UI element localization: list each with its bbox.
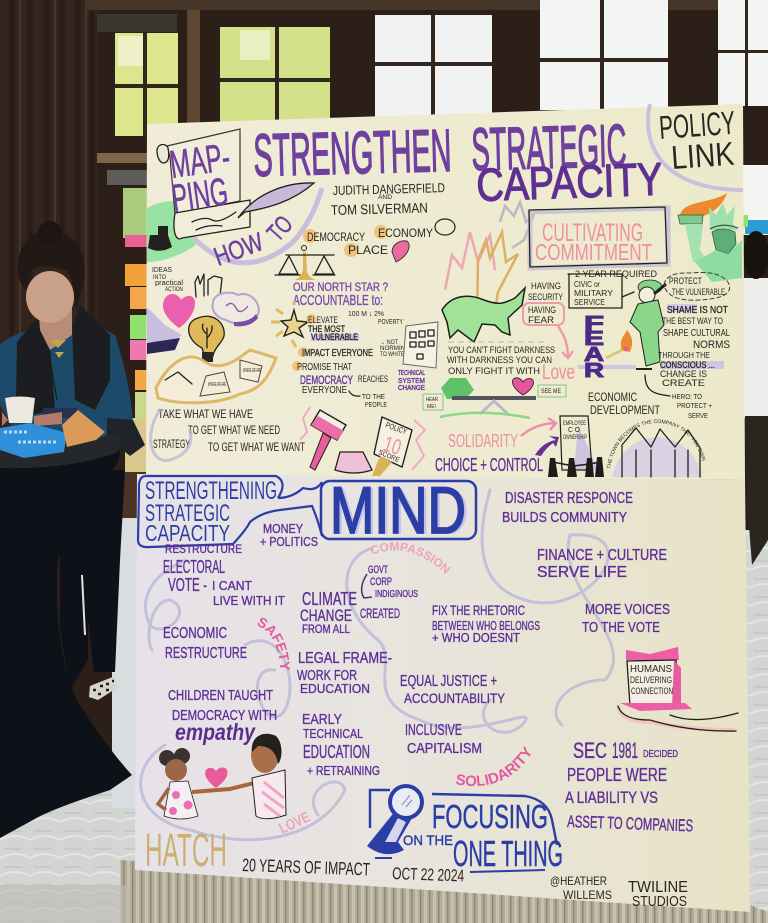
word: FEAR, with burning match: F <box>584 313 604 335</box>
text: shame is not the best way: SHAPE CULTURAL <box>663 327 730 339</box>
text: inclusive capitalism: CAPITALISM <box>407 740 482 757</box>
text: sec 1981 decided <box>565 738 693 835</box>
accountability list: PROMISE THAT <box>297 362 352 373</box>
header: strengthening strategic capacity banner <box>138 476 322 547</box>
text: disaster response builds community <box>502 490 633 526</box>
box: two year required service: SERVICE <box>574 297 605 307</box>
scroll: MAP-PING: MAP- <box>167 136 233 187</box>
box: two year required service: CIVIC or <box>574 279 600 289</box>
icon: statue of liberty <box>678 193 742 282</box>
democracy economy place: DEMOCRACY <box>307 230 365 244</box>
policy score sign: POLICY <box>384 420 409 437</box>
text: equal justice + accountability <box>400 673 506 706</box>
text: sec 1981 decided: ASSET TO COMPANIES <box>567 812 693 835</box>
event line: 20 years of impact, date: 20 YEARS OF IMPACT <box>242 855 370 879</box>
text: sec 1981 decided: A LIABILITY VS <box>565 788 658 807</box>
accountability list: ELEVATE <box>308 315 338 325</box>
text: legal framework for education: LEGAL FRAME- <box>298 650 392 667</box>
text: legal framework for education: EDUCATION <box>300 681 370 696</box>
credit: Heather Willems, Twiline Studios <box>550 874 688 910</box>
text: economic development: DEVELOPMENT <box>590 403 661 417</box>
word: FEAR, with burning match: E <box>584 328 604 350</box>
icon: gavel and sound block <box>310 410 372 473</box>
icon: seesaw with heart: HEAR <box>426 397 438 403</box>
solidarity and choice + control: CHOICE + CONTROL <box>435 455 543 475</box>
text: inclusive capitalism <box>405 722 482 757</box>
icon: employee co-ownership building and people: EMPLOYEE <box>563 421 586 427</box>
heading: MIND: MIND <box>330 473 466 547</box>
accountability list: POVERTY <box>378 317 403 326</box>
accountability list: 100 M ↓ 2% <box>348 309 384 318</box>
credit: Heather Willems, Twiline Studios: TWILINE <box>628 879 688 896</box>
heading: focusing on the one thing, with magnifier: ONE THING <box>453 833 563 874</box>
title: STRENGTHEN STRATEGIC CAPACITY: CAPACITY <box>476 153 663 211</box>
text: finance + culture serve life: SERVE LIFE <box>537 564 627 581</box>
solidarity and choice + control: SOLIDARITY <box>448 431 518 451</box>
text: fix the rhetoric: + WHO DOESNT <box>432 630 520 645</box>
credit: Heather Willems, Twiline Studios: STUDIOS <box>632 893 687 910</box>
policy score sign: SCORE <box>377 449 401 464</box>
text: early technical education: EDUCATION <box>303 742 370 762</box>
icon: gift held on a hand: CONNECTION <box>631 686 673 697</box>
accountability list: → NOT <box>380 340 398 346</box>
icon: seesaw with heart: ME! <box>427 404 436 410</box>
text: early technical education: + RETRAINING <box>307 763 380 778</box>
strategy text: TO GET WHAT WE WANT <box>208 440 305 454</box>
text: early technical education: EARLY <box>302 711 342 728</box>
text: money + politics: MONEY <box>263 521 303 536</box>
logo: Policy Link <box>648 104 743 190</box>
illustration: flames and reaching hands <box>445 202 534 322</box>
quote: fight darkness with love <box>447 345 575 384</box>
technical system change grid <box>398 322 438 392</box>
callout: hero to protect and serve <box>645 375 713 420</box>
text: restructure electoral vote: LIVE WITH IT <box>213 593 285 608</box>
text: shame is not the best way: CHANGE IS <box>660 369 707 379</box>
text: disaster response builds community: DISASTER RESPONCE <box>505 490 633 507</box>
mountain landscape: WHERE WE ARE <box>208 382 226 388</box>
quote: fight darkness with love: YOU CAN'T FIGHT DARKNESS <box>448 345 555 356</box>
text: restructure electoral vote: ELECTORAL <box>163 557 225 577</box>
quote: fight darkness with love: ONLY FIGHT IT WITH <box>448 366 540 377</box>
callout: hero to protect and serve: PROTECT + <box>677 401 713 410</box>
word: FEAR, with burning match: R <box>584 360 605 382</box>
heading: focusing on the one thing, with magnifier <box>367 786 563 874</box>
word: FEAR, with burning match <box>578 313 636 382</box>
text: fix the rhetoric: BETWEEN WHO BELONGS <box>432 618 540 633</box>
democracy economy place: PLACE <box>348 243 388 257</box>
scroll: MAP-PING: PING <box>169 171 231 221</box>
heading: focusing on the one thing, with magnifier: ON THE <box>403 832 453 848</box>
sticky notes on the wall <box>122 235 147 520</box>
accountability list: IMPACT EVERYONE <box>302 348 373 359</box>
logo: Policy Link: LINK <box>670 135 735 176</box>
mountain landscape: WHERE WE ARE <box>243 368 261 374</box>
word: FEAR, with burning match: A <box>584 344 604 366</box>
icon: scales <box>275 246 335 280</box>
democracy economy place <box>303 219 455 262</box>
header: strengthening strategic capacity banner: CAPACITY <box>145 520 230 546</box>
text: early technical education: TECHNICAL <box>303 726 363 741</box>
arc word: love: LOVE <box>277 809 313 838</box>
credit: Heather Willems, Twiline Studios: @HEATHER <box>550 874 607 888</box>
text: more voices to the vote: MORE VOICES <box>585 601 670 618</box>
heading: our north star accountable to: OUR NORTH STAR ? <box>293 280 388 294</box>
text: fix the rhetoric <box>432 602 540 645</box>
quote: fight darkness with love: WITH DARKNESS YOU CAN <box>447 355 552 366</box>
text: fix the rhetoric: FIX THE RHETORIC <box>432 602 525 618</box>
text: sec 1981 decided: 1981 <box>612 738 638 763</box>
accountability list: REACHES <box>358 374 388 384</box>
text: legal framework for education: WORK FOR <box>297 667 357 684</box>
text: climate change created from all: FROM ALL <box>302 622 350 636</box>
speakers: AND <box>378 195 393 201</box>
text: restructure electoral vote: RESTRUCTURE <box>165 542 242 556</box>
heading: focusing on the one thing, with magnifier: FOCUSING <box>432 798 548 835</box>
icon: green bull <box>442 288 545 342</box>
mountain landscape <box>147 307 276 403</box>
text: finance + culture serve life: FINANCE + CULTURE <box>537 547 667 564</box>
icon: gift held on a hand: HUMANS <box>630 664 672 675</box>
text: disaster response builds community: BUILDS COMMUNITY <box>502 509 627 526</box>
header: strengthening strategic capacity banner: STRATEGIC <box>145 500 230 527</box>
text: early technical education <box>302 711 380 778</box>
heading: our north star accountable to <box>293 280 388 309</box>
header: strengthening strategic capacity banner: STRENGTHENING <box>145 477 277 505</box>
windows behind the board <box>97 0 768 238</box>
box: two year required service: MILITARY <box>574 288 613 298</box>
strategy text <box>151 407 305 460</box>
icon: seesaw with heart <box>423 378 566 418</box>
accountability list: PEOPLE <box>365 400 387 409</box>
person at the left: woman reading <box>0 221 145 700</box>
accountability list: DEMOCRACY <box>300 373 353 387</box>
icon: star <box>271 301 308 347</box>
icon: gift held on a hand <box>618 647 738 731</box>
democracy economy place: ECONOMY <box>378 226 433 240</box>
ideas into practical action: practical <box>155 280 183 287</box>
carpet floor <box>0 518 768 923</box>
strategy text: TO GET WHAT WE NEED <box>188 423 280 437</box>
text: climate change created from all: CLIMATE <box>302 589 357 609</box>
callout: protect the vulnerable: PROTECT <box>669 276 702 286</box>
text: shame is not the best way: THE BEST WAY TO <box>662 316 723 327</box>
box: cultivating commitment: COMMITMENT <box>535 239 652 265</box>
security and fear callout: FEAR <box>528 315 555 325</box>
text: sec 1981 decided: SEC <box>573 738 607 763</box>
technical system change grid: CHANGE <box>398 385 425 392</box>
text: shame is not the best way: CREATE <box>662 378 705 388</box>
callout: protect the vulnerable <box>664 272 730 300</box>
text: shame is not the best way: NORMS <box>693 339 730 351</box>
title: STRENGTHEN STRATEGIC CAPACITY: STRENGTHEN <box>253 117 452 189</box>
black round table with basket, cup and folder <box>0 396 132 838</box>
text: equal justice + accountability: ACCOUNTABILITY <box>404 690 506 706</box>
security and fear callout: SECURITY <box>528 292 563 303</box>
panel: lower board <box>135 474 750 912</box>
text: economic development <box>588 390 661 417</box>
strategy text: TAKE WHAT WE HAVE <box>158 407 253 421</box>
speakers: TOM SILVERMAN <box>331 199 428 218</box>
text: children taught democracy with empathy <box>168 687 277 745</box>
person on the right <box>743 231 768 565</box>
policy score sign <box>300 407 425 476</box>
ideas into practical action: ACTION <box>165 287 183 293</box>
text: economic restructure: RESTRUCTURE <box>165 645 247 662</box>
accountability list: VULNERABLE <box>311 332 358 342</box>
security and fear callout: HAVING <box>528 305 556 315</box>
icon: employee co-ownership building and people: OWNERSHIP <box>563 435 587 441</box>
security and fear callout <box>523 281 573 358</box>
text: more voices to the vote <box>582 601 670 636</box>
box: cultivating commitment <box>529 207 668 268</box>
ideas into practical action: INTO <box>153 274 166 281</box>
strategy text: STRATEGY <box>153 437 190 451</box>
text: legal framework for education <box>297 650 392 696</box>
callout: hero to protect and serve: HERO: TO <box>672 392 702 401</box>
ideas into practical action: IDEAS <box>152 267 172 274</box>
quote: fight darkness with love: Love <box>542 361 575 384</box>
icon: quill <box>238 183 314 218</box>
illustration: girl and boy sharing a heart <box>158 734 286 819</box>
text: economic restructure: ECONOMIC <box>163 625 227 642</box>
callout: hero to protect and serve: SERVE <box>688 411 708 420</box>
text: climate change created from all <box>300 564 418 636</box>
icon: gift held on a hand: DELIVERING <box>630 675 672 686</box>
scroll: MAP-PING <box>147 129 250 262</box>
policy score sign: 10 <box>380 431 404 460</box>
security and fear callout: HAVING <box>531 281 561 292</box>
text: more voices to the vote: TO THE VOTE <box>582 619 660 636</box>
text: restructure electoral vote: I CANT <box>212 578 252 593</box>
accountability list <box>292 309 418 409</box>
text: money + politics <box>260 521 318 549</box>
icon: houses in a circle: THE TOWN BECOMES THE COMPANY THAT YOU OWN <box>606 419 706 468</box>
text: restructure electoral vote: VOTE - <box>168 575 207 595</box>
arc word: compassion: COMPASSION <box>371 542 451 574</box>
text: climate change created from all: INDIGINOUS <box>375 589 418 600</box>
heading: HOW TO with arc <box>194 188 322 272</box>
text: equal justice + accountability: EQUAL JUSTICE + <box>400 673 497 690</box>
decorative lavender swirls on lower board <box>141 490 614 840</box>
text: shame is not the best way: SHAME IS NOT <box>667 305 728 316</box>
technical system change grid: SYSTEM <box>398 378 425 385</box>
heading: our north star accountable to: ACCOUNTABLE to: <box>293 292 383 309</box>
event line: 20 years of impact, date: OCT 22 2024 <box>392 864 464 886</box>
ideas into practical action <box>152 267 183 293</box>
icon: soldier <box>630 280 666 369</box>
speakers: JUDITH DANGERFIELD <box>333 180 445 198</box>
text: inclusive capitalism: INCLUSIVE <box>405 722 462 739</box>
icon: employee co-ownership building and people: C O <box>568 427 581 434</box>
logo: HATCH: HATCH <box>145 824 227 876</box>
text: money + politics: + POLITICS <box>260 534 318 549</box>
text: finance + culture serve life <box>537 547 667 581</box>
accountability list: TO THE <box>362 392 385 401</box>
text: children taught democracy with empathy: DEMOCRACY WITH <box>172 707 277 724</box>
technical system change grid: TECHNICAL <box>398 370 425 377</box>
text: children taught democracy with empathy: CHILDREN TAUGHT <box>168 687 273 704</box>
panel: upper board <box>146 104 745 480</box>
accountability list: NORMING <box>380 346 410 352</box>
heading: HOW TO with arc: TO <box>262 210 299 247</box>
accountability list: THE MOST <box>308 324 345 334</box>
text: restructure electoral vote <box>163 542 285 608</box>
text: climate change created from all: CREATED <box>360 605 400 621</box>
box: two year required service: 2 YEAR REQUIRED <box>575 269 657 279</box>
heading: MIND: MIND <box>333 474 469 548</box>
solidarity and choice + control <box>435 418 559 475</box>
box: two year required service <box>568 269 657 308</box>
accountability list: TO WHITENESS <box>380 352 418 358</box>
icon: employee co-ownership building and people <box>548 416 604 477</box>
arc word: safety: SAFETY <box>258 618 290 670</box>
text: climate change created from all: GOVT <box>368 564 388 576</box>
text: shame is not the best way: THROUGH THE <box>658 350 710 360</box>
icon: heart, hands and brain <box>163 274 259 328</box>
text: economic development: ECONOMIC <box>588 390 637 404</box>
speakers <box>331 180 445 218</box>
text: economic restructure <box>163 625 247 662</box>
callout: protect the vulnerable: THE VULNERABLE <box>672 287 725 297</box>
text: children taught democracy with empathy: empathy <box>175 719 256 745</box>
box: cultivating commitment: CULTIVATING <box>542 219 643 247</box>
icon: light bulb <box>189 316 224 362</box>
text: climate change created from all: CORP <box>370 576 392 588</box>
icon: seesaw with heart: SEE ME <box>541 389 561 395</box>
icon: ink bottle <box>148 226 172 251</box>
arc word: solidarity: SOLIDARITY <box>456 746 531 786</box>
text: shame is not the best way <box>658 304 730 388</box>
credit: Heather Willems, Twiline Studios: WILLEMS <box>563 888 612 902</box>
text: climate change created from all: CHANGE <box>300 606 352 625</box>
text: sec 1981 decided: PEOPLE WERE <box>567 765 667 785</box>
heading: HOW TO with arc: HOW <box>210 226 267 272</box>
text: sec 1981 decided: DECIDED <box>643 749 678 760</box>
accountability list: EVERYONE <box>302 385 347 396</box>
text: shame is not the best way: CONSCIOUS ... <box>660 360 715 370</box>
